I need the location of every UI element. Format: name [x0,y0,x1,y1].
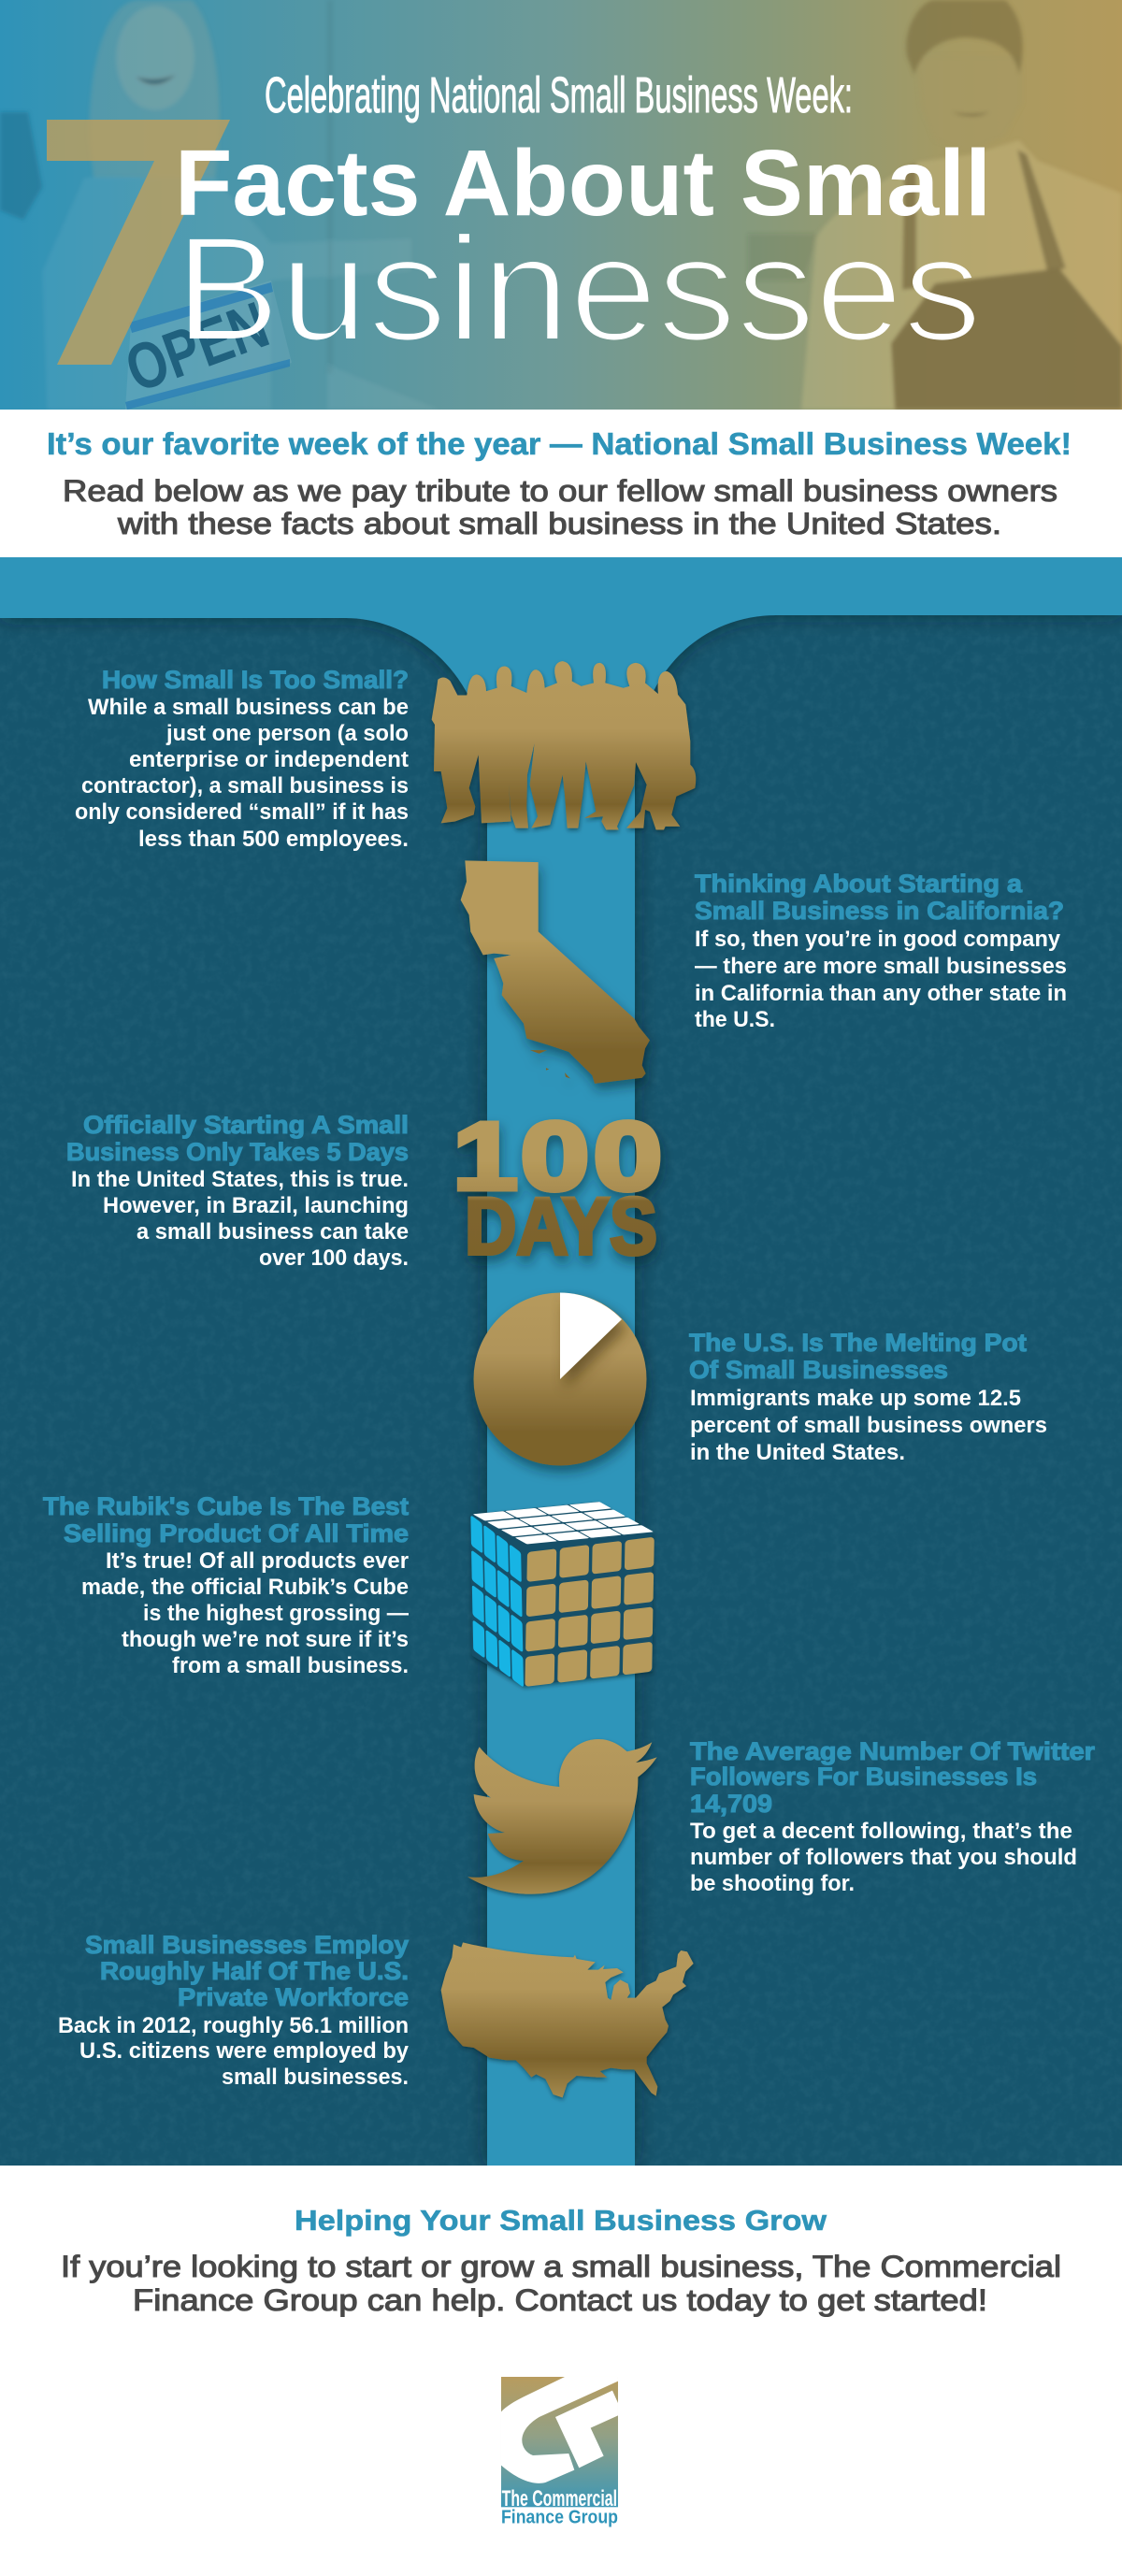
fact 7 text: U.S. citizens were employed by [79,2038,410,2064]
fact 2 text: in California than any other state in [695,981,1067,1006]
logo text: The Commercial [502,2486,617,2511]
icon: pie chart [473,1292,647,1466]
fact 6 text: number of followers that you should [690,1845,1077,1870]
logo text [501,2486,618,2527]
closing text: Finance Group can help. Contact us today to get started! [133,2283,987,2317]
fact 4 text: in the United States. [690,1440,905,1465]
logo: The Commercial Finance Group [501,2377,618,2527]
fact 4 text [689,1329,1047,1465]
closing text [61,2250,1061,2317]
fact 3 text: a small business can take [137,1219,409,1245]
fact 3 text: Officially Starting A Small [83,1111,409,1139]
icon: 100 days [453,1102,662,1272]
fact 3 text: over 100 days. [259,1245,409,1271]
icon: Twitter bird [468,1739,657,1894]
fact 6 text: 14,709 [690,1790,772,1818]
fact 2 text: Thinking About Starting a [695,870,1023,898]
fact 7 text: small businesses. [222,2065,409,2090]
fact 6 text: To get a decent following, that’s the [690,1819,1072,1844]
intro text: with these facts about small business in the United States. [117,507,1001,540]
icon: 100 days: 0 [521,1102,589,1210]
header photo: open sign: OPEN [116,288,278,406]
title [181,75,985,340]
fact 7 text: Back in 2012, roughly 56.1 million [58,2013,409,2038]
cube left face [470,1515,524,1688]
fact 7 text [58,1931,410,2090]
panel: blue band and central pillar [0,557,1122,2166]
cube front face [525,1537,654,1687]
fact 5 text: though we’re not sure if it’s [122,1627,409,1652]
icon: 100 days: 0 [594,1102,662,1210]
fact 5 text [43,1492,409,1678]
fact 1 text: While a small business can be [88,695,409,720]
title: Businesses [175,205,982,372]
fact 7 text: Roughly Half Of The U.S. [100,1957,409,1985]
icon: 100 days: DAYS [465,1182,657,1272]
fact 1 text: How Small Is Too Small? [102,666,409,694]
fact 3 text: However, in Brazil, launching [103,1193,409,1218]
fact 5 text: from a small business. [172,1653,409,1678]
logo text: Finance Group [501,2506,618,2527]
fact 2 text [695,870,1067,1032]
fact 5 text: made, the official Rubik’s Cube [81,1575,409,1600]
intro text [63,474,1057,540]
intro text: Read below as we pay tribute to our fellow small business owners [63,474,1057,508]
header banner [0,0,1122,410]
panel: closing white section [0,2166,1122,2576]
fact 4 text: percent of small business owners [690,1413,1047,1438]
fact 3 text: In the United States, this is true. [71,1167,409,1192]
fact 6 text: be shooting for. [690,1871,855,1896]
icon: United States map [441,1942,694,2097]
closing heading: Helping Your Small Business Grow [295,2204,827,2237]
closing text: If you’re looking to start or grow a small business, The Commercial [61,2250,1061,2283]
fact 5 text: Selling Product Of All Time [64,1519,409,1547]
fact 1 text: enterprise or independent [129,747,409,772]
fact 7 text: Small Businesses Employ [85,1931,409,1959]
fact 1 text: just one person (a solo [165,721,409,746]
fact 2 text: the U.S. [695,1007,775,1032]
fact 4 text: Of Small Businesses [689,1356,948,1384]
cube top face [473,1502,654,1544]
fact 3 text: Business Only Takes 5 Days [66,1138,409,1166]
fact 6 text: The Average Number Of Twitter [690,1737,1096,1765]
fact 1 text: less than 500 employees. [138,827,409,852]
fact 4 text: The U.S. Is The Melting Pot [689,1329,1027,1357]
fact 2 text: If so, then you’re in good company [695,927,1061,952]
fact 2 text: Small Business in California? [695,897,1064,925]
header photo: shop scene [0,0,1122,410]
icon: Rubik's cube [470,1502,654,1688]
icon: California map [461,860,650,1084]
fact 1 text: contractor), a small business is [81,773,409,799]
fact 6 text [690,1737,1096,1896]
big number 7 [47,120,230,365]
logo mark [501,2377,618,2507]
fact 6 text: Followers For Businesses Is [690,1763,1037,1791]
fact 5 text: is the highest grossing — [143,1601,409,1626]
fact 1 text [75,666,409,852]
fact 4 text: Immigrants make up some 12.5 [690,1386,1021,1411]
panel: intro white section [0,410,1122,557]
icon: group of people [432,661,696,829]
intro heading: It’s our favorite week of the year — National Small Business Week! [47,426,1072,461]
title: Facts About Small [175,131,991,236]
fact 1 text: only considered “small” if it has [75,799,409,825]
fact 5 text: It’s true! Of all products ever [106,1548,409,1574]
fact 7 text: Private Workforce [178,1983,409,2011]
icon: 100 days: 1 [453,1102,518,1210]
panel: dark textured background [0,608,1122,2166]
fact 3 text [66,1111,409,1271]
fact 5 text: The Rubik's Cube Is The Best [43,1492,409,1520]
fact 2 text: — there are more small businesses [695,954,1067,979]
